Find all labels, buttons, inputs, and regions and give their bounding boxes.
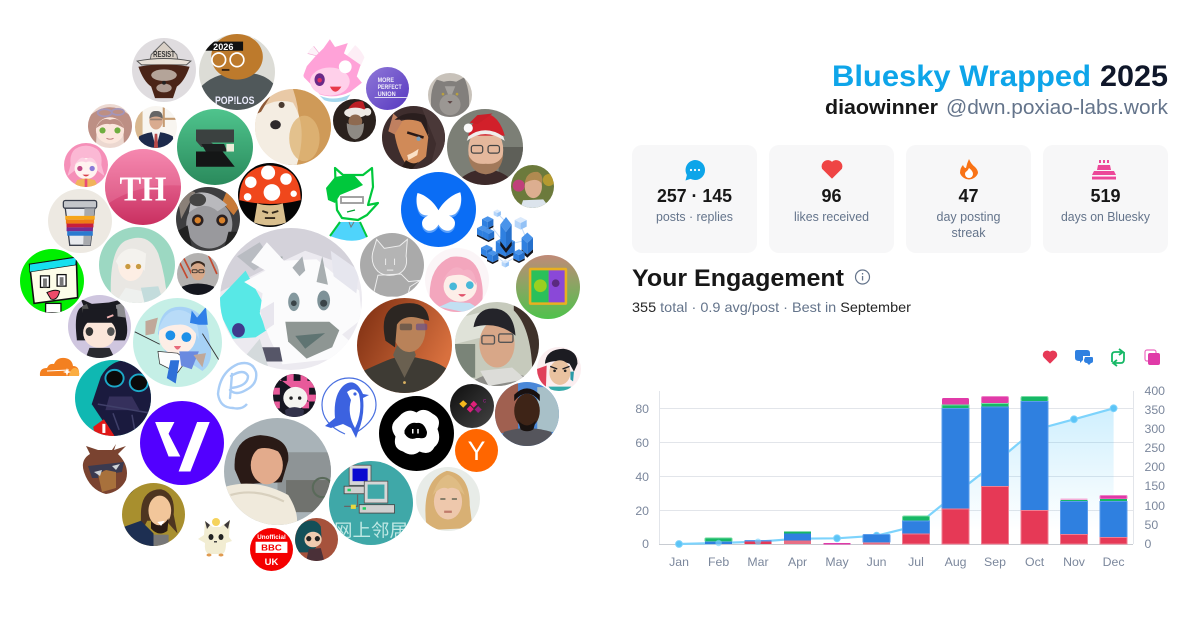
stat card: likes received: 96 — [821, 186, 842, 206]
stat card: days on Bluesky: days on Bluesky — [1061, 210, 1151, 224]
user handle line — [825, 97, 1169, 119]
bar: Nov — [1060, 498, 1088, 544]
icon: isometric blue blocks — [477, 209, 533, 267]
avatar: pumpkin head person: POP!LOS — [215, 95, 254, 107]
avatar: golden dog — [255, 89, 331, 165]
avatar: brown hair anime girl — [88, 104, 132, 148]
avatar: TH logo — [105, 149, 181, 225]
avatar: resist bear — [132, 38, 196, 102]
avatar: man in cap with glasses — [455, 302, 539, 386]
icon: legend heart — [1043, 351, 1057, 363]
month labels: Apr — [788, 555, 807, 569]
avatar: blue hair anime girl — [133, 298, 222, 387]
right axis labels: 50 — [1144, 518, 1158, 532]
avatar: gray cat — [428, 73, 472, 117]
stat card: posts and replies: 257 · 145 — [657, 186, 732, 206]
left axis labels: 0 — [642, 537, 649, 551]
month labels: Feb — [708, 555, 729, 569]
month labels: Nov — [1063, 555, 1086, 569]
stacked bars — [705, 396, 1127, 544]
avatar: framed pixel art — [516, 255, 580, 319]
cumulative area — [679, 408, 1114, 544]
month labels: Sep — [984, 555, 1006, 569]
avatar: Y Combinator: Y — [468, 436, 486, 466]
left axis labels: 20 — [635, 504, 649, 518]
right axis labels: 150 — [1144, 479, 1165, 493]
bar: Aug — [942, 398, 969, 544]
month labels: Jan — [669, 555, 689, 569]
avatar: silver hair anime — [99, 227, 175, 303]
stat card: posts and replies: posts · replies — [656, 210, 733, 224]
user handle line: @dwn.poxiao-labs.work — [946, 97, 1169, 119]
right axis labels: 300 — [1144, 422, 1165, 436]
icon: heart — [822, 161, 842, 178]
avatar: pink haired chibi — [304, 39, 364, 102]
bar: Oct — [1021, 396, 1048, 544]
stat card: posts and replies — [632, 145, 757, 253]
stat card: day posting streak: day posting — [936, 210, 1001, 224]
icon: P at-sign sketch — [216, 362, 258, 410]
avatar: large white furry character — [220, 228, 362, 370]
avatar: Unofficial BBC UK: Unofficial — [257, 535, 286, 541]
avatar: small dark with diamonds — [450, 384, 494, 428]
title: Bluesky Wrapped — [832, 60, 1091, 93]
avatar: blond young man — [511, 165, 554, 208]
left axis labels: 40 — [635, 470, 649, 484]
avatar: Darth Vader with glasses — [75, 360, 151, 436]
line markers over bars — [715, 538, 761, 546]
avatar: green outline character — [326, 166, 380, 241]
avatar: pumpkin head person: 2026 — [213, 42, 233, 52]
month labels: May — [825, 555, 849, 569]
bar: Jun — [863, 534, 890, 544]
avatar: gray anime creature — [176, 187, 240, 251]
avatar: Y Combinator — [455, 429, 498, 472]
icon: legend quote — [1145, 350, 1160, 365]
stat card: day posting streak — [906, 145, 1031, 253]
bar: Mar — [744, 540, 772, 544]
avatar: red mushroom — [238, 163, 302, 227]
avatar: gray sketch — [360, 233, 424, 297]
right axis labels: 200 — [1144, 460, 1165, 474]
avatar: green square character — [20, 249, 84, 313]
right axis labels: 350 — [1144, 403, 1165, 417]
engagement summary line: 355 total · 0.9 avg/post · Best in September — [632, 299, 911, 315]
avatar: Zeta green logo — [177, 109, 253, 185]
avatar: anime man dark hair — [382, 106, 445, 169]
right axis labels — [1144, 384, 1165, 551]
avatar: resist bear: RESIST — [153, 49, 175, 59]
avatar: TH logo: TH — [119, 170, 167, 209]
avatar: small dark with diamonds: c — [483, 397, 486, 404]
stat card: days on Bluesky: 519 — [1090, 186, 1121, 206]
month labels: Mar — [747, 555, 769, 569]
avatar: pompadour illustration — [537, 347, 581, 391]
avatar: More Perfect Union: UNION — [378, 91, 396, 98]
panel: avatar bubble cluster — [20, 34, 581, 571]
month labels: Jul — [908, 555, 924, 569]
avatar: penguin — [321, 377, 377, 438]
icon: Cloudflare cloud — [40, 358, 80, 376]
avatar: man in santa hat — [447, 109, 523, 185]
avatar: network computers — [329, 461, 413, 545]
avatar: checker pattern character — [273, 374, 316, 417]
bar: Sep — [982, 396, 1008, 544]
icon: legend replies — [1075, 350, 1093, 365]
title: 2025 — [1100, 60, 1168, 93]
avatar: Verge logo — [140, 401, 224, 485]
bar: Jul — [902, 516, 930, 544]
stat card: day posting streak: streak — [952, 226, 986, 240]
month labels — [669, 555, 1125, 569]
left axis labels: 80 — [635, 402, 649, 416]
avatar: bearded man cartoon — [122, 483, 185, 546]
avatar: pink haired anime girl — [425, 248, 489, 312]
bar: May — [824, 543, 850, 544]
right axis labels: 250 — [1144, 441, 1165, 455]
stat card: days on Bluesky — [1043, 145, 1168, 253]
avatar: teal hair character — [295, 518, 338, 561]
avatar: smiling woman with city — [224, 418, 331, 525]
avatar: More Perfect Union: PERFECT — [378, 84, 402, 91]
month labels: Dec — [1103, 555, 1125, 569]
avatar: man on orange background — [357, 298, 452, 393]
month labels: Jun — [867, 555, 887, 569]
avatar: santa hat bearded man — [333, 99, 376, 142]
bar: Dec — [1100, 496, 1127, 544]
month labels: Oct — [1025, 555, 1045, 569]
avatar: pink hair anime — [64, 143, 108, 187]
avatar: brown hair glasses chibi — [82, 444, 127, 494]
icon: birthday cake — [1092, 160, 1116, 180]
avatar: network computers: 网上邻居 — [334, 521, 408, 541]
icon: info — [856, 270, 870, 284]
cumulative line — [676, 405, 1117, 547]
avatar: man in suit — [135, 106, 177, 148]
stat card: likes received: likes received — [794, 210, 869, 224]
avatar: More Perfect Union: MORE — [378, 77, 395, 84]
right axis labels: 0 — [1144, 537, 1152, 551]
icon: flame — [960, 159, 978, 179]
avatar: Meowth plush — [198, 518, 232, 556]
chart legend icons — [1043, 349, 1160, 366]
stat card: day posting streak: 47 — [958, 186, 979, 206]
icon: speech bubble — [686, 160, 705, 180]
avatar: blonde woman — [416, 467, 480, 531]
bar: Apr — [784, 532, 811, 544]
avatar: Bluesky butterfly — [401, 172, 476, 247]
month labels: Aug — [945, 555, 967, 569]
avatar: More Perfect Union — [366, 67, 409, 110]
right axis labels: 100 — [1144, 499, 1165, 513]
avatar: man with glasses — [177, 253, 219, 295]
heading: Your Engagement: Your Engagement — [632, 265, 844, 292]
avatar: Unofficial BBC UK: UK — [265, 557, 278, 568]
icon: legend repost — [1112, 349, 1124, 366]
stat card: likes received — [769, 145, 894, 253]
avatar: man with beard outdoors — [495, 382, 559, 446]
bar: Feb — [705, 538, 732, 544]
left axis labels: 60 — [635, 436, 649, 450]
avatar: black with white flower — [379, 396, 454, 471]
avatar: black hair anime girl — [68, 295, 131, 358]
avatar: Unofficial BBC UK: BBC — [261, 542, 282, 552]
avatar: rainbow coffee cup — [48, 189, 112, 253]
avatar: Unofficial BBC UK — [250, 528, 293, 571]
user handle line: diaowinner — [825, 97, 938, 119]
right axis labels: 400 — [1144, 384, 1165, 398]
left axis labels — [635, 402, 649, 551]
avatar: pumpkin head person — [199, 34, 275, 110]
combo chart: engagement by month — [635, 384, 1165, 569]
